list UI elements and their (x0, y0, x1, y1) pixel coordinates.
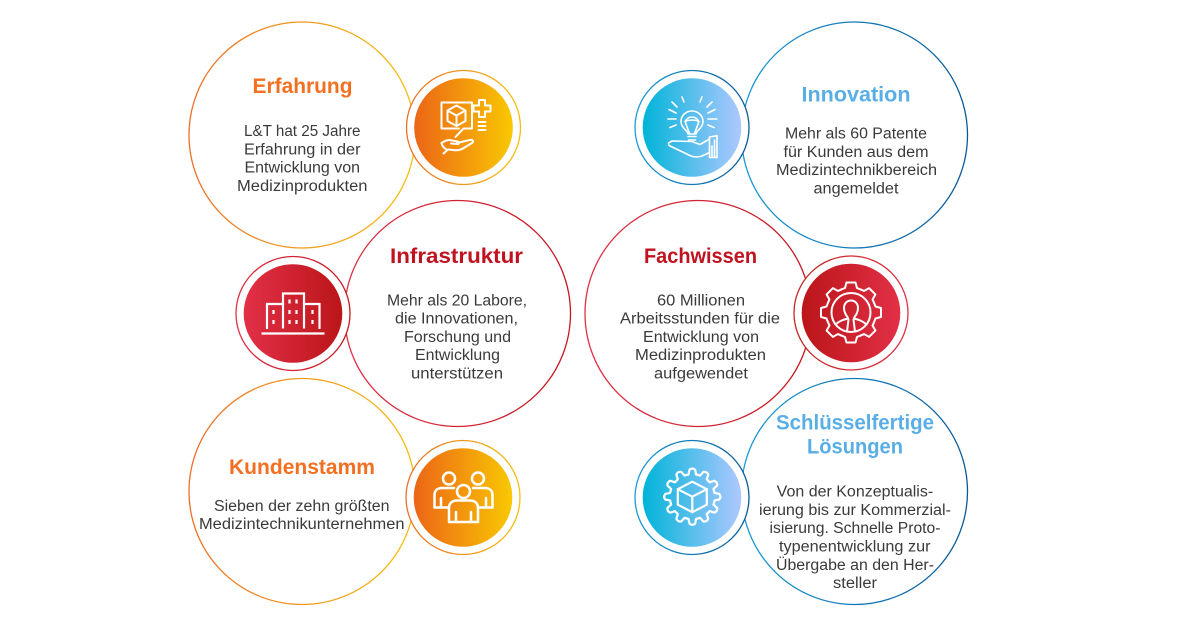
heading: Schlüsselfertige Lösungen: Lösungen (807, 434, 903, 458)
text: Innovation description: für Kunden aus dem (784, 144, 928, 161)
circle: Schlüsselfertige Lösungen outline (742, 378, 968, 604)
text: Schlüsselfertige Lösungen description (759, 484, 951, 592)
text: Infrastruktur description: Entwicklung (415, 347, 500, 364)
heading: Kundenstamm: Kundenstamm (229, 455, 375, 479)
icon badge: Schlüsselfertige Lösungen (635, 440, 749, 554)
text: Kundenstamm description (199, 498, 404, 533)
text: Innovation description (776, 126, 937, 198)
heading: Schlüsselfertige Lösungen: Schlüsselfertige (776, 410, 934, 434)
panel: Infrastruktur (236, 200, 570, 426)
circle: Fachwissen outline (585, 200, 811, 426)
text: Infrastruktur description: Forschung und (404, 329, 511, 346)
text: Infrastruktur description: die Innovationen, (395, 310, 518, 328)
heading: Schlüsselfertige Lösungen (776, 410, 934, 458)
text: Schlüsselfertige Lösungen description: ierung bis zur Kommerzial- (759, 502, 951, 519)
icon badge: Erfahrung (406, 70, 520, 184)
text: Infrastruktur description: Mehr als 20 Labore, (387, 292, 527, 310)
text: Schlüsselfertige Lösungen description: Von der Konzeptualis- (777, 484, 933, 500)
text: Fachwissen description (620, 292, 780, 382)
icon: gear with person (821, 282, 881, 342)
circle: Infrastruktur outline (344, 200, 570, 426)
panel: Innovation (635, 22, 968, 248)
panel: Fachwissen (585, 200, 908, 426)
text: Schlüsselfertige Lösungen description: Übergabe an den Her- (776, 556, 934, 574)
icon badge: Infrastruktur (236, 256, 350, 370)
icon badge: Kundenstamm (406, 440, 520, 554)
icon: light bulb on hand (668, 97, 717, 158)
text: Innovation description: Medizintechnikbereich (776, 162, 937, 179)
text: Infrastruktur description: unterstützen (411, 366, 503, 382)
panel: Schlüsselfertige Lösungen (635, 378, 968, 604)
text: Kundenstamm description: Sieben der zehn größten (214, 498, 390, 515)
circle: Innovation outline (742, 22, 968, 248)
text: Infrastruktur description (387, 292, 527, 382)
text: Innovation description: angemeldet (814, 180, 899, 198)
text: Schlüsselfertige Lösungen description: isierung. Schnelle Proto- (770, 520, 940, 537)
text: Schlüsselfertige Lösungen description: steller (833, 575, 877, 592)
text: Fachwissen description: Medizinprodukten (635, 347, 766, 364)
text: Kundenstamm description: Medizintechnikunternehmen (199, 516, 404, 533)
heading: Innovation: Innovation (802, 82, 910, 106)
icon badge: Innovation (635, 70, 749, 184)
text: Erfahrung description: Entwicklung von (244, 160, 360, 176)
text: Erfahrung description: Erfahrung in der (244, 142, 360, 158)
text: Erfahrung description: Medizinprodukten (237, 178, 368, 195)
circle: Erfahrung outline (189, 22, 415, 248)
icon: box in speech bubble with plus and hand (442, 100, 490, 154)
icon: three people (434, 472, 492, 522)
text: Innovation description: Mehr als 60 Patente (785, 126, 927, 142)
icon: gear with box (664, 469, 720, 525)
text: Fachwissen description: Entwicklung von (643, 329, 759, 346)
heading: Erfahrung: Erfahrung (252, 74, 352, 98)
panel: Kundenstamm (189, 378, 520, 604)
text: Schlüsselfertige Lösungen description: typenentwicklung zur (779, 538, 930, 556)
icon: buildings (262, 294, 324, 334)
text: Fachwissen description: Arbeitsstunden für die (620, 310, 780, 328)
heading: Fachwissen: Fachwissen (644, 244, 757, 268)
text: Erfahrung description: L&T hat 25 Jahre (244, 123, 360, 140)
circle: Kundenstamm outline (189, 378, 415, 604)
text: Erfahrung description (237, 123, 368, 195)
icon badge: Fachwissen (794, 256, 908, 370)
text: Fachwissen description: 60 Millionen (657, 292, 745, 310)
heading: Infrastruktur: Infrastruktur (390, 244, 524, 268)
panel: Erfahrung (189, 22, 520, 248)
text: Fachwissen description: aufgewendet (654, 366, 749, 382)
